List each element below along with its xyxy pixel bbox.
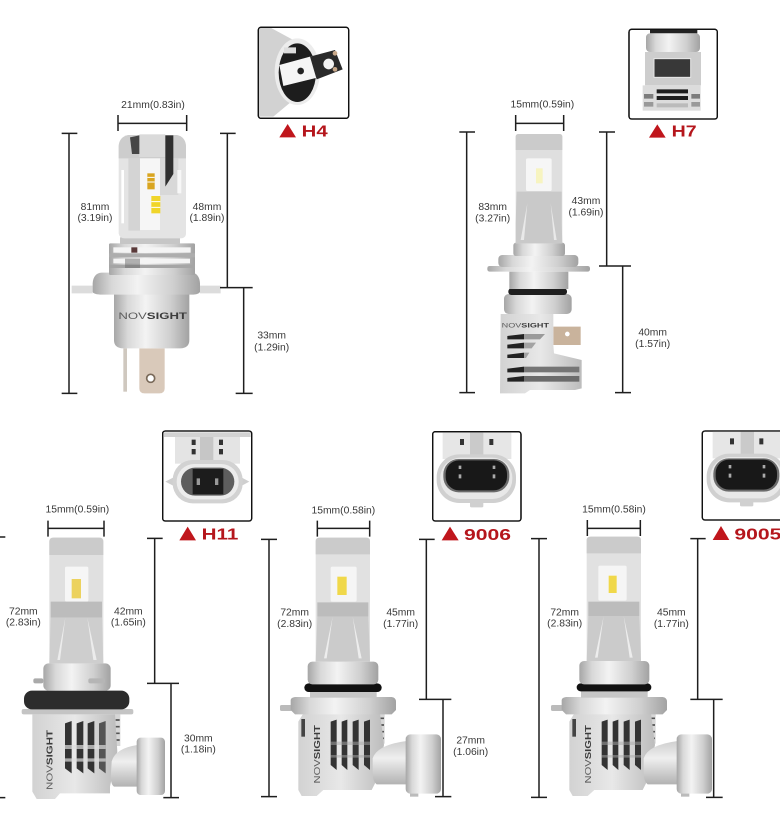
panel: 9005 bulb <box>531 431 780 797</box>
total height dimension: 83mm: (3.27in) <box>475 214 510 225</box>
base height dimension: 33mm: (1.29in) <box>254 343 289 354</box>
head height dimension: 48mm <box>189 133 253 288</box>
label: H11 <box>179 526 239 543</box>
base height dimension: 33mm: 33mm <box>257 330 286 341</box>
base height dimension: 40mm: (1.57in) <box>635 339 670 350</box>
width dimension: 15mm <box>510 100 574 131</box>
head height dimension: 45mm: (1.77in) <box>654 619 689 630</box>
total height dimension: 81mm: 81mm <box>81 202 109 213</box>
head height dimension: 42mm: (1.65in) <box>111 617 146 628</box>
label: H7 <box>649 124 697 141</box>
head height dimension: 48mm: (1.89in) <box>189 213 225 224</box>
total height dimension: 72mm <box>531 539 582 797</box>
inset photo: 9006 connector <box>433 432 521 521</box>
panel: H11 bulb <box>0 431 252 799</box>
total height dimension: 72mm: (2.83in) <box>547 619 582 630</box>
panel: H4 bulb <box>62 27 349 393</box>
head height dimension: 45mm: (1.77in) <box>383 619 418 630</box>
total height dimension: 72mm: 72mm <box>550 608 579 619</box>
base height dimension: 27mm: (1.06in) <box>453 747 488 758</box>
panel: H7 bulb <box>459 29 717 393</box>
base height dimension: 40mm <box>615 266 670 393</box>
width dimension: 15mm: 15mm(0.59in) <box>510 100 574 111</box>
base height dimension: 30mm: (1.18in) <box>181 745 216 756</box>
total height dimension: 72mm <box>0 537 41 798</box>
base height dimension: 33mm <box>236 288 289 393</box>
label: H4: H4 <box>302 124 328 141</box>
total height dimension: 72mm: (2.83in) <box>277 619 312 630</box>
width dimension: 21mm <box>118 100 187 131</box>
label: 9006: 9006 <box>464 527 511 544</box>
label: H4 <box>279 124 328 141</box>
panel: 9006 bulb <box>261 432 521 797</box>
inset photo: H7 base <box>629 29 717 119</box>
total height dimension: 81mm: (3.19in) <box>77 213 113 224</box>
label: 9006 <box>442 527 511 544</box>
label: 9005 <box>713 526 780 543</box>
base height dimension: 27mm <box>435 699 488 797</box>
base height bracket <box>706 699 723 797</box>
bulb: H4 <box>72 134 221 393</box>
inset photo: 9005 connector <box>702 431 780 520</box>
head height dimension: 42mm: 42mm <box>114 606 143 617</box>
total height dimension: 81mm <box>62 133 113 393</box>
total height dimension: 72mm: 72mm <box>280 608 309 619</box>
total height dimension: 83mm: 83mm <box>478 202 507 213</box>
width dimension: 15mm <box>45 505 109 537</box>
head height dimension: 45mm <box>654 539 723 699</box>
inset photo: H11 connector <box>163 431 252 521</box>
head height dimension: 43mm: 43mm <box>572 196 600 207</box>
bulb: H11: NOVSIGHT <box>45 729 55 790</box>
base height dimension: 30mm: 30mm <box>184 733 213 744</box>
width dimension: 15mm: 15mm(0.59in) <box>45 505 109 516</box>
base height dimension: 40mm: 40mm <box>638 328 667 339</box>
bulb: H11 <box>22 538 165 799</box>
head height dimension: 43mm: (1.69in) <box>568 208 604 219</box>
bulb: H7 <box>487 134 590 393</box>
base height dimension: 30mm <box>163 683 216 798</box>
width dimension: 15mm: 15mm(0.58in) <box>311 506 375 517</box>
head height dimension: 42mm <box>111 538 179 683</box>
bulb: 9005: NOVSIGHT <box>584 725 593 783</box>
total height dimension: 83mm <box>459 132 510 393</box>
head height dimension: 43mm <box>568 132 631 266</box>
bulb: 9006: NOVSIGHT <box>313 725 322 783</box>
label: 9005: 9005 <box>734 526 780 543</box>
bulb: 9006 <box>280 538 441 797</box>
width dimension: 15mm: 15mm(0.58in) <box>582 505 646 516</box>
label: H7: H7 <box>672 124 697 141</box>
head height dimension: 45mm <box>383 539 451 699</box>
total height dimension: 72mm: 72mm <box>9 606 38 617</box>
base height dimension: 27mm: 27mm <box>456 735 485 746</box>
width dimension: 15mm <box>582 505 646 536</box>
head height dimension: 48mm: 48mm <box>193 202 221 213</box>
head height dimension: 45mm: 45mm <box>657 608 686 619</box>
bulb: 9005 <box>551 537 712 797</box>
bulb: H4: NOV SIGHT <box>118 311 188 321</box>
bulb: H7: NOV SIGHT <box>502 322 549 329</box>
total height dimension: 72mm <box>261 539 312 797</box>
width dimension: 15mm <box>311 506 375 537</box>
label: H11: H11 <box>202 526 239 543</box>
inset photo: H4 base <box>258 27 349 118</box>
width dimension: 21mm: 21mm(0.83in) <box>121 100 185 111</box>
head height dimension: 45mm: 45mm <box>386 608 415 619</box>
total height dimension: 72mm: (2.83in) <box>6 617 41 628</box>
